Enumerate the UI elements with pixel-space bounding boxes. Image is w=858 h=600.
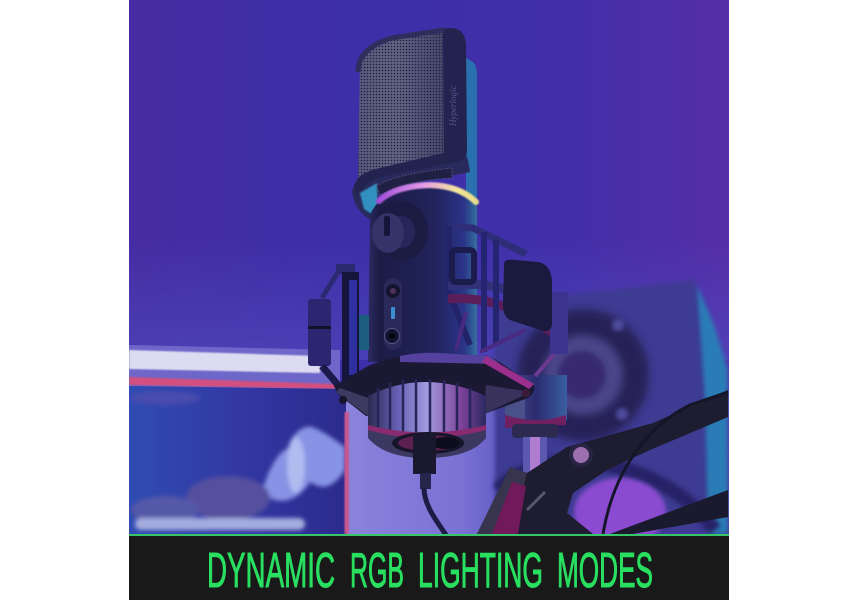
boom arm (477, 390, 728, 534)
speaker side edge glow (697, 285, 728, 534)
blue glow under shroud (360, 183, 378, 218)
vertical brand label: Hyperlogic (448, 86, 458, 127)
lower shroud (352, 152, 470, 221)
shock mount side tab (550, 292, 568, 354)
microphone (308, 28, 728, 535)
inner mesh slot (377, 168, 452, 195)
purple wall (129, 0, 729, 535)
white light strip (129, 350, 320, 373)
pop filter top rim (358, 30, 444, 72)
caption bar (129, 534, 729, 600)
green rule (129, 534, 729, 536)
mount base plate (334, 353, 534, 416)
microphone body (368, 186, 477, 362)
gain knob (372, 213, 415, 253)
cable loop behind (498, 462, 715, 530)
speaker woofer (517, 309, 649, 441)
boom arm bolt (569, 443, 593, 467)
RGB ring (379, 185, 476, 202)
USB port ring (392, 432, 464, 454)
caption: RGB (350, 544, 404, 598)
pale panel behind the microphone (346, 401, 497, 534)
collar bottom ring (368, 425, 486, 458)
rear grille strip (466, 58, 477, 205)
shock mount elastic block (503, 260, 552, 331)
pink monitor edge (344, 412, 349, 534)
base plate underside (336, 388, 368, 416)
left shock mount (308, 264, 369, 385)
caption: MODES (557, 544, 653, 598)
control panel (384, 278, 402, 350)
grey ledge (129, 345, 340, 390)
threaded collar (368, 382, 486, 439)
mesh shading (358, 33, 444, 178)
product photo infographic (129, 0, 729, 600)
clouds (130, 391, 345, 530)
caption: DYNAMIC (207, 544, 335, 598)
pop filter side panel (354, 28, 467, 196)
USB cable (413, 434, 446, 535)
pop filter mesh (358, 33, 444, 178)
pink light strip (129, 377, 335, 389)
caption: LIGHTING (418, 544, 543, 598)
background photo (129, 0, 729, 546)
monitor with cloud image (129, 386, 349, 534)
gain knob recess (374, 201, 428, 261)
caption (207, 544, 653, 598)
right shock mount (448, 226, 566, 376)
lower wall lightening (129, 290, 729, 360)
speaker cabinet (495, 280, 728, 546)
lower support rod (505, 375, 567, 487)
